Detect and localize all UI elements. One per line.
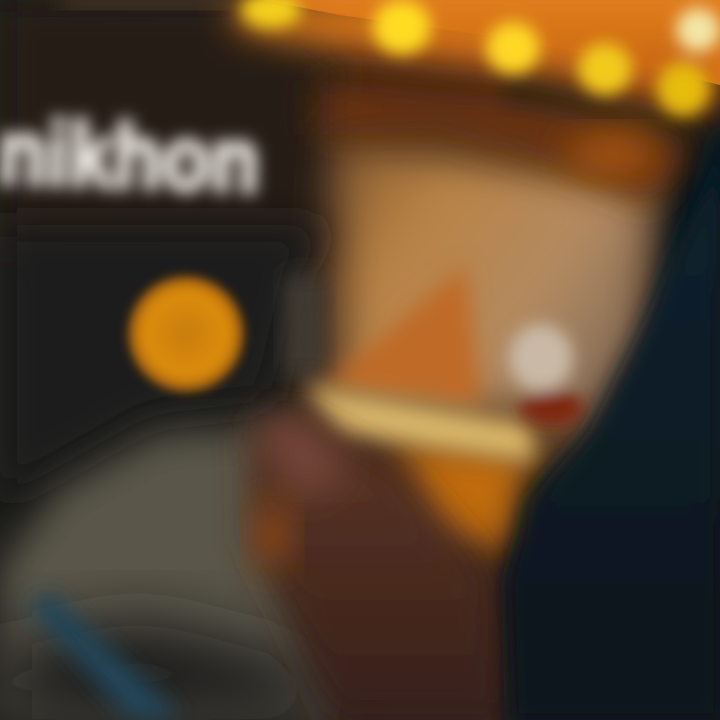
thumb orange reflection — [254, 501, 290, 569]
sign post — [285, 275, 325, 375]
panel: orange ceiling band — [230, 0, 720, 120]
light 1 — [241, 0, 301, 28]
panel: brown under-layer — [300, 120, 660, 470]
dark beam below the lights — [320, 80, 700, 205]
food: lower orange wedge — [395, 440, 535, 555]
icon: orange circle — [128, 276, 244, 392]
panel: dark sign board — [0, 225, 330, 500]
cup top white — [509, 324, 573, 392]
light 5 — [657, 62, 709, 116]
top left faint glow — [60, 0, 230, 8]
light 3 — [486, 22, 540, 74]
cup red base — [520, 390, 584, 426]
light 4 — [578, 43, 632, 95]
panel: dark navy shoulder — [508, 110, 720, 720]
lights — [241, 0, 720, 116]
arm: grey sleeve — [0, 430, 340, 720]
panel: beige wall — [345, 150, 650, 420]
light 6 pale — [676, 8, 720, 52]
sleeve lower shadow — [0, 620, 340, 720]
food: orange triangle — [325, 265, 482, 405]
light 2 — [373, 0, 431, 54]
hand: brown skin — [250, 415, 510, 720]
ceiling base fill — [262, 0, 720, 85]
panel: dark upper left — [0, 0, 345, 250]
food: cream crust — [305, 385, 535, 462]
blurred white sign text: nikhon — [0, 101, 261, 213]
finger highlight — [255, 418, 350, 500]
sleeve blue streak — [28, 592, 180, 720]
cup — [509, 324, 584, 426]
sign glow on the beam — [567, 135, 657, 175]
